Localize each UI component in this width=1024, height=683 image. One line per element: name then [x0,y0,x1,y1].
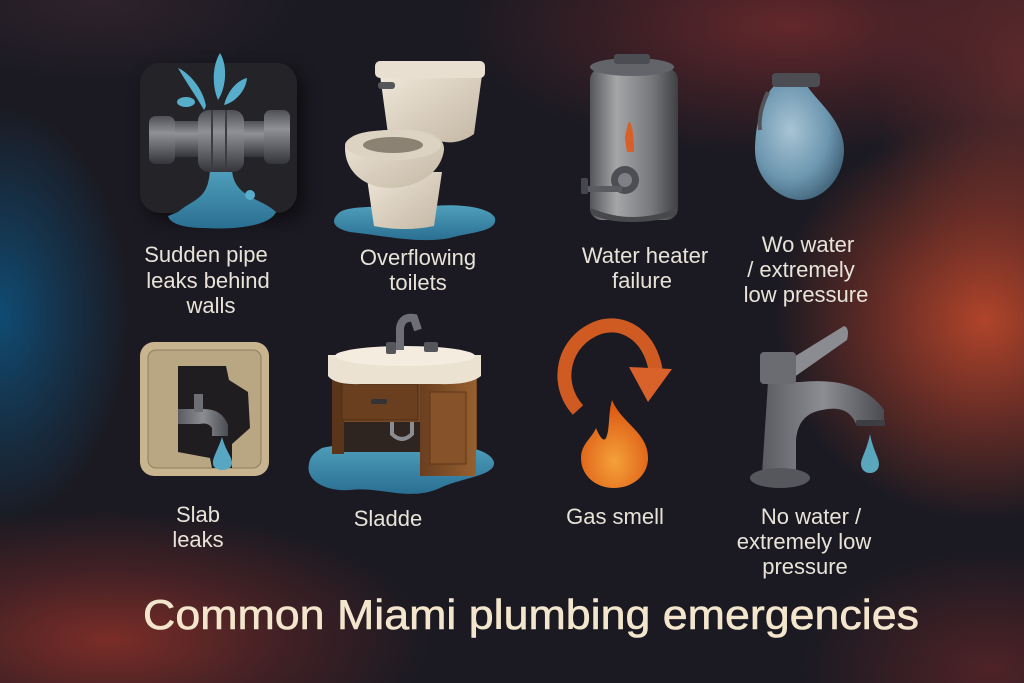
icon: slab leak [140,342,269,476]
label: water heater failure [582,243,708,293]
label: water heater failure: Water heater [582,243,708,268]
label: no water top: / extremely [747,257,855,282]
label: overflowing toilets [360,245,476,295]
title: Common Miami plumbing emergencies [143,591,919,638]
icon: sink vanity [308,318,494,494]
label: sudden pipe leaks: leaks behind [146,268,270,293]
icon: faucet [750,326,885,488]
label: no water top: low pressure [744,282,868,307]
label: no water top [744,232,868,307]
label: sudden pipe leaks: Sudden pipe [144,242,268,267]
label: no water top: Wo water [762,232,854,257]
icon: water balloon [755,73,844,200]
label: no water bottom: extremely low [737,529,871,554]
label: sudden pipe leaks: walls [186,293,235,318]
icon: leaking pipe [140,53,304,228]
label: sladde: Sladde [354,506,422,531]
label: water heater failure: failure [612,268,672,293]
icon: circular arrow [564,325,672,410]
icon: flame [581,400,648,488]
label: slab leaks [172,502,224,552]
label: overflowing toilets: Overflowing [360,245,476,270]
icon: water heater [581,54,678,222]
icon: overflowing toilet [334,61,495,240]
label: slab leaks: Slab [176,502,220,527]
label: no water bottom: No water / [761,504,862,529]
label: sudden pipe leaks [144,242,270,318]
label: slab leaks: leaks [172,527,224,552]
label: overflowing toilets: toilets [389,270,447,295]
label: no water bottom [737,504,871,579]
label: no water bottom: pressure [762,554,848,579]
label: gas smell: Gas smell [566,504,664,529]
